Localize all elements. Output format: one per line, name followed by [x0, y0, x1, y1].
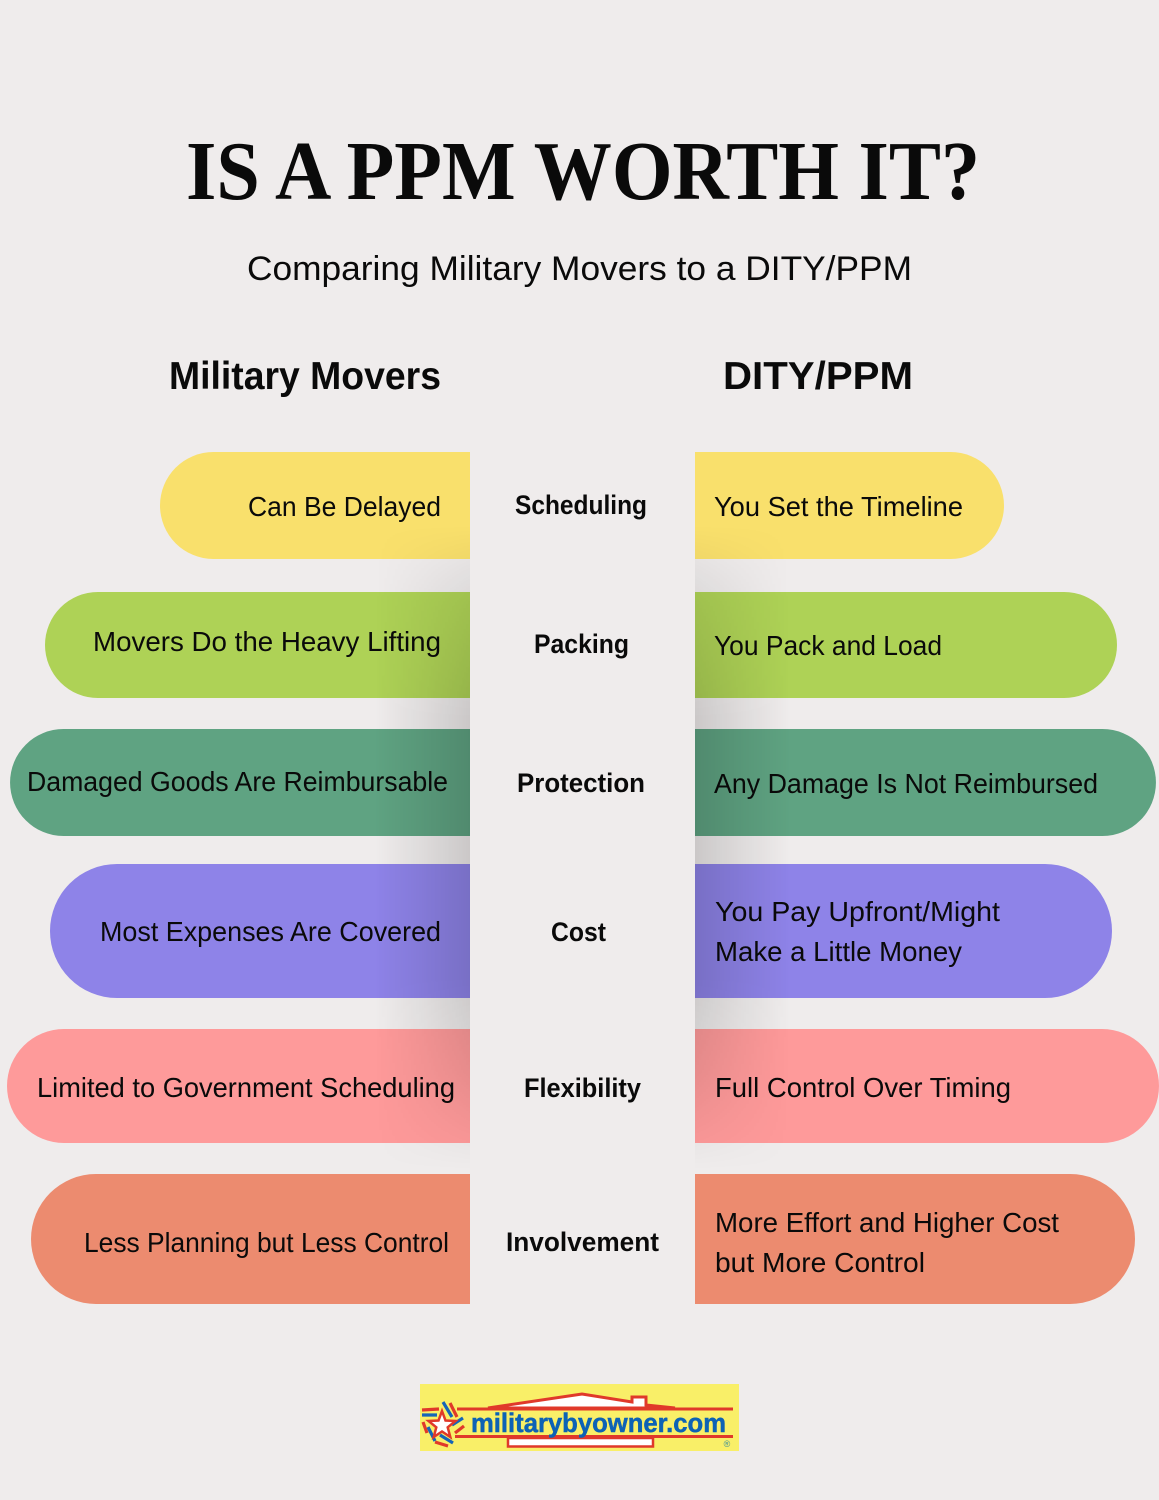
logo registered mark: ®	[724, 1439, 731, 1449]
right pill: you set the timeline: You Set the Timeline	[714, 491, 963, 522]
left pill: can be delayed	[160, 452, 470, 559]
row: protection	[10, 729, 1156, 836]
left pill: limited to government scheduling: Limited to Government Scheduling	[37, 1072, 455, 1103]
right pill: you pack and load: You Pack and Load	[714, 630, 942, 661]
left pill: most expenses are covered: Most Expenses Are Covered	[100, 916, 441, 947]
right pill: you pay upfront: You Pay Upfront/Might	[715, 896, 1000, 927]
row: flexibility	[7, 1029, 1159, 1143]
row: packing	[45, 592, 1117, 698]
row: scheduling	[160, 452, 1004, 559]
left pill: limited to government scheduling	[7, 1029, 470, 1143]
right pill: you pay upfront	[695, 864, 1112, 998]
right pill: full control over timing	[695, 1029, 1159, 1143]
label: involvement: Involvement	[506, 1227, 659, 1257]
center column shadow	[398, 556, 768, 1134]
right pill: any damage is not reimbursed: Any Damage Is Not Reimbursed	[714, 768, 1098, 799]
left pill: most expenses are covered	[50, 864, 470, 998]
label: protection: Protection	[517, 768, 645, 798]
right pill: any damage is not reimbursed	[695, 729, 1156, 836]
right pill: full control over timing: Full Control Over Timing	[715, 1072, 1011, 1103]
heading: DITY/PPM: DITY/PPM	[723, 355, 913, 398]
label: flexibility: Flexibility	[524, 1073, 641, 1103]
heading: Military Movers: Military Movers	[169, 355, 441, 398]
left pill: can be delayed: Can Be Delayed	[248, 491, 441, 522]
logo: militarybyowner.com	[420, 1384, 739, 1451]
right pill: you pay upfront: Make a Little Money	[715, 936, 962, 967]
left pill: less planning but less control: Less Planning but Less Control	[84, 1227, 449, 1258]
right pill: you set the timeline	[695, 452, 1004, 559]
left pill: damaged goods are reimbursable	[10, 729, 470, 836]
label: scheduling: Scheduling	[515, 490, 647, 520]
title: IS A PPM WORTH IT?	[186, 125, 980, 218]
logo star	[422, 1402, 464, 1446]
row: cost	[50, 864, 1112, 998]
subtitle: Comparing Military Movers to a DITY/PPM	[247, 250, 912, 288]
right pill: more effort and higher cost	[695, 1174, 1135, 1304]
left pill: movers do the heavy lifting	[45, 592, 470, 698]
row: involvement	[31, 1174, 1135, 1304]
right pill: more effort and higher cost: but More Control	[715, 1247, 925, 1278]
right pill: you pack and load	[695, 592, 1117, 698]
label: cost: Cost	[551, 917, 606, 947]
left pill: damaged goods are reimbursable: Damaged Goods Are Reimbursable	[27, 766, 448, 797]
label: packing: Packing	[534, 629, 629, 659]
right pill: more effort and higher cost: More Effort and Higher Cost	[715, 1207, 1059, 1238]
logo wordmark: militarybyowner.com	[471, 1408, 726, 1438]
logo house roof	[488, 1394, 675, 1408]
left pill: less planning but less control	[31, 1174, 470, 1304]
left pill: movers do the heavy lifting: Movers Do the Heavy Lifting	[93, 626, 441, 657]
logo house base	[508, 1438, 653, 1446]
